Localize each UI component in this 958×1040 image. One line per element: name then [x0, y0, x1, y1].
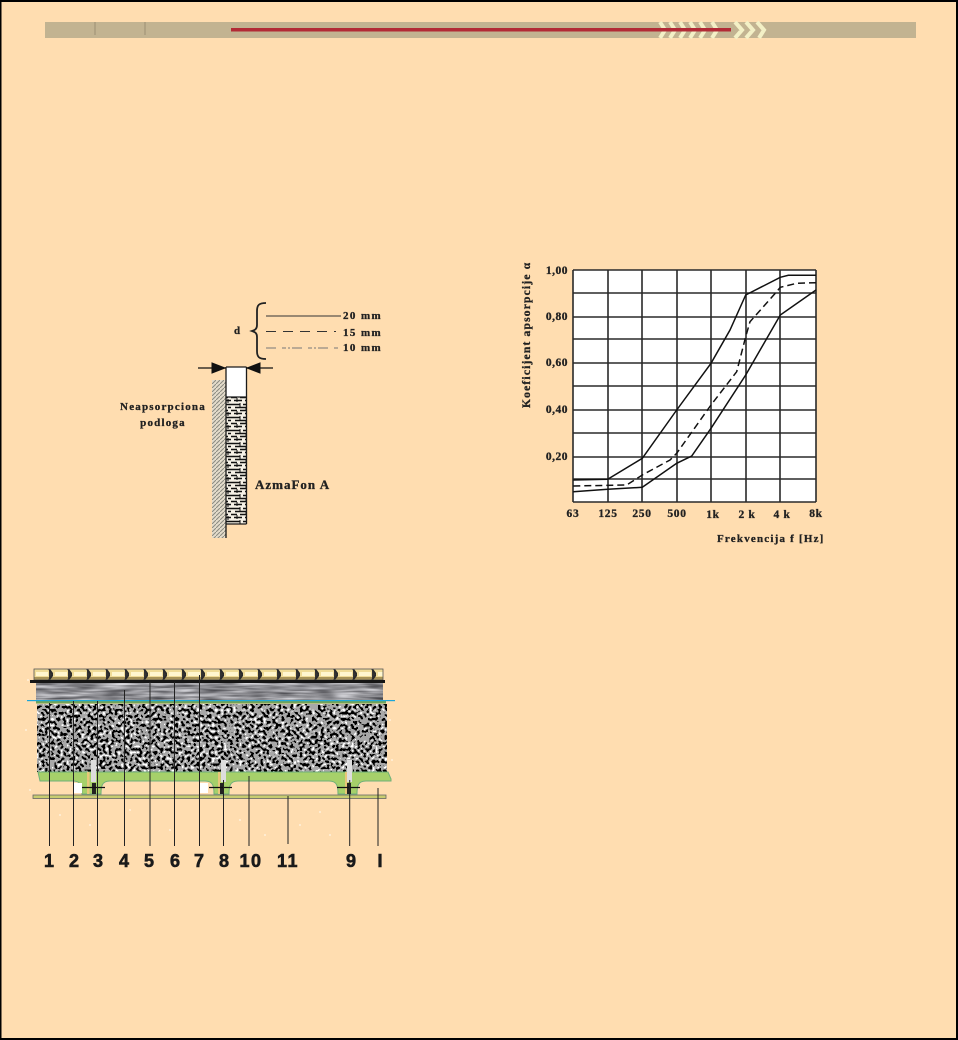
header chevrons	[660, 22, 764, 38]
y tick labels: 0,60	[546, 357, 568, 369]
x tick labels: 1k	[706, 509, 720, 521]
callout numbers: 6	[170, 851, 180, 871]
y tick labels: 1,00	[546, 265, 568, 277]
x axis title: Frekvencija f [Hz]	[717, 533, 825, 545]
wall hatch	[212, 380, 226, 538]
callout numbers: 8	[219, 851, 229, 871]
legend values: 20 mm	[343, 310, 382, 322]
brace	[252, 303, 266, 359]
callout numbers: 1	[44, 851, 54, 871]
x tick labels: 2 k	[738, 509, 756, 521]
y tick labels	[546, 265, 568, 463]
ceiling section diagram	[25, 669, 395, 871]
callout numbers: I	[377, 851, 383, 871]
curve 20 mm	[573, 275, 816, 480]
black bar	[30, 680, 385, 683]
x tick labels	[567, 508, 823, 521]
curve 15 mm	[573, 283, 816, 486]
joint hangers	[82, 760, 360, 794]
x tick labels: 250	[632, 508, 652, 520]
label: substrate: Neapsorpciona	[120, 401, 206, 413]
callout numbers: 7	[194, 851, 204, 871]
x tick labels: 4 k	[773, 509, 791, 521]
plot area	[573, 270, 816, 502]
green profile	[38, 772, 391, 794]
header red rule	[231, 28, 731, 32]
callout numbers: 11	[277, 851, 299, 871]
y axis title: Koeficijent apsorpcije α	[521, 262, 533, 408]
callout numbers: 10	[239, 851, 263, 871]
callout numbers: 5	[144, 851, 154, 871]
stone wool	[37, 704, 387, 772]
x tick labels: 8k	[809, 508, 823, 520]
label: product: AzmaFon A	[255, 477, 330, 492]
y tick labels: 0,80	[546, 311, 568, 323]
label d: d	[234, 325, 240, 337]
callout numbers: 2	[69, 851, 79, 871]
x tick labels: 500	[667, 508, 687, 520]
header marks	[95, 22, 145, 35]
absorption chart	[521, 262, 825, 545]
tiles	[34, 669, 383, 680]
x tick labels: 125	[598, 508, 618, 520]
label: substrate	[120, 401, 206, 429]
green membrane	[36, 701, 386, 704]
legend values: 15 mm	[343, 327, 382, 339]
mounting diagram	[120, 303, 382, 538]
callout numbers: 3	[93, 851, 103, 871]
y tick labels: 0,20	[546, 451, 568, 463]
legend values: 10 mm	[343, 342, 382, 354]
callout numbers	[44, 851, 383, 871]
legend values	[343, 310, 382, 354]
blue line	[27, 700, 395, 701]
white inserts	[74, 783, 208, 793]
dimension arrows	[198, 363, 273, 373]
callout numbers: 4	[119, 851, 129, 871]
leader lines	[50, 675, 378, 846]
speckles	[25, 679, 393, 836]
absorber panel	[226, 367, 246, 538]
grid	[573, 270, 816, 502]
x tick labels: 63	[567, 508, 579, 520]
label: substrate: podloga	[140, 417, 186, 429]
y tick labels: 0,40	[546, 404, 568, 416]
header band	[45, 22, 916, 38]
legend lines	[266, 316, 341, 348]
slate layer	[36, 683, 383, 700]
curve 10 mm	[573, 290, 816, 492]
ceiling board	[33, 795, 386, 798]
callout numbers: 9	[346, 851, 356, 871]
